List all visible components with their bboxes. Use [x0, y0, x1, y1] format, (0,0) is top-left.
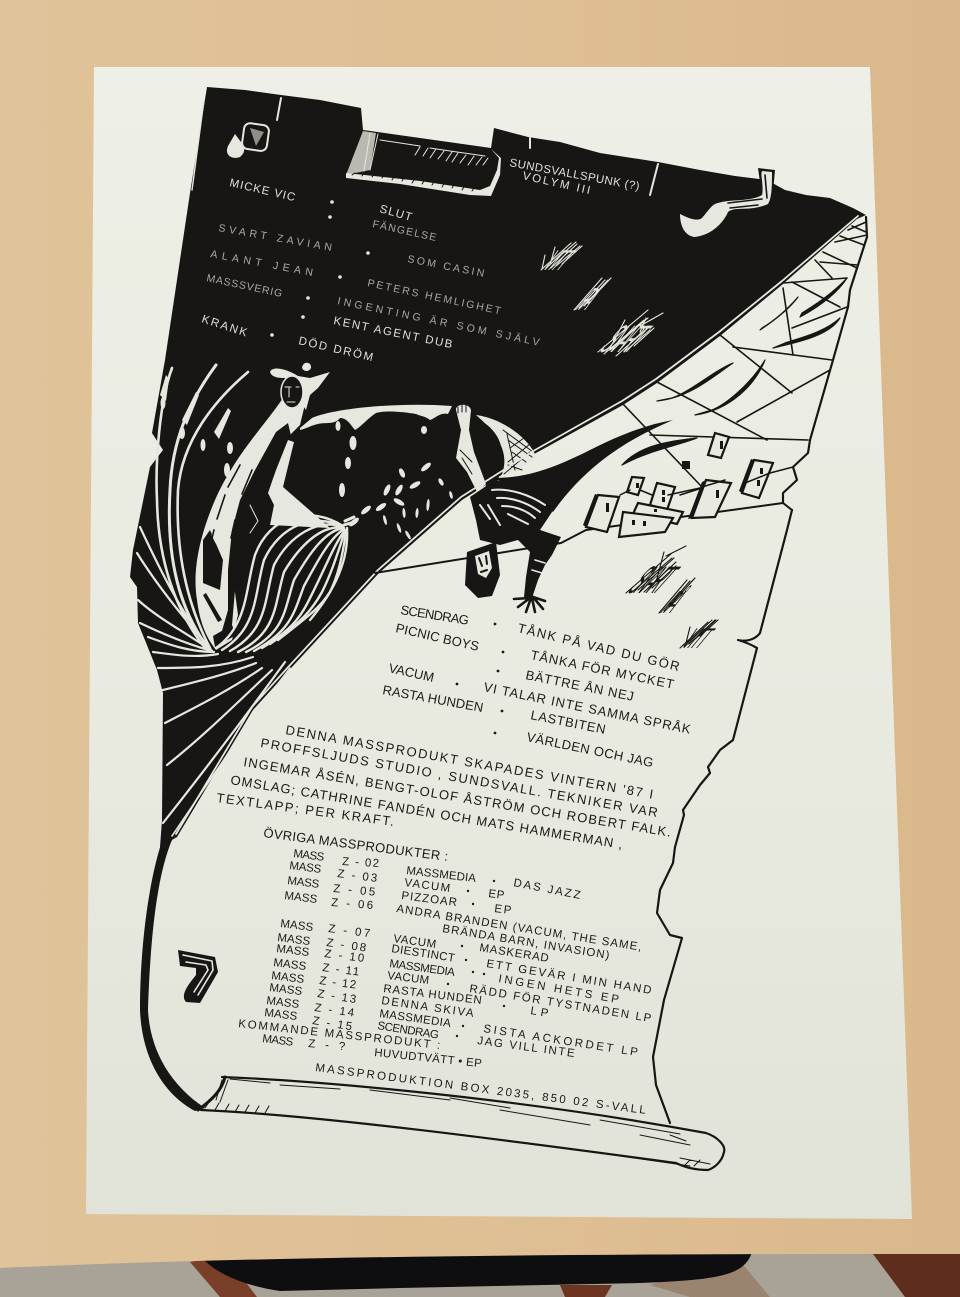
text: catalogue list: JAG VILL INTE: [477, 1035, 576, 1060]
text: catalogue list: MASSMEDIA: [379, 1008, 452, 1030]
text: catalogue list: RASTA HUNDEN: [383, 983, 482, 1007]
text: side A track list in white: SOM CASIN: [406, 253, 485, 280]
text: side B track list: LASTBITEN: [529, 707, 607, 737]
text: side A track list in white: FÄNGELSE: [371, 218, 437, 244]
text: slashed scribble in white: PÅ: [568, 281, 611, 317]
text: catalogue list: Z - 03: [337, 868, 378, 885]
text: side A track list in white: MASSSVERIG: [205, 272, 283, 300]
text: catalogue list: MASS: [280, 918, 314, 934]
text: catalogue list: ANDRA BRANDEN (VACUM, THE SAME,: [396, 903, 642, 954]
text: slashed scribble in black: PÅ: [653, 584, 696, 620]
text: slashed scribble in black: SNART: [619, 558, 689, 601]
text: catalogue list: EP: [494, 903, 512, 917]
text: catalogue list: MASS: [273, 957, 307, 973]
text: side A track list in white: DÖD DRÖM: [297, 335, 374, 364]
panel: rolled bottom of the scroll: [198, 1077, 724, 1170]
text: slashed scribble in white: [536, 242, 663, 360]
text: catalogue list: BRÄNDA BARN, INVASION): [442, 923, 610, 962]
text: side A track list in white: PETERS HEMLIGHET: [366, 277, 502, 317]
text: side A track list in white: [200, 177, 541, 364]
text: catalogue list: MASS: [266, 995, 300, 1011]
text: catalogue list: Z - 14: [314, 1002, 355, 1020]
text: side B track list: VÄRLDEN OCH JAG: [525, 729, 655, 770]
illustration: woman figure: [196, 363, 330, 650]
text: catalogue list: MASS: [264, 1007, 298, 1023]
illustration: white rim of the diagonal edge: [176, 216, 858, 834]
text: side B track list: PICNIC BOYS: [394, 620, 481, 654]
icon: torn tab ticks: [277, 98, 658, 195]
text: credits paragraph: INGEMAR ÅSÉN, BENGT-OLOF ÅSTRÖM OCH ROBERT FALK.: [243, 754, 672, 840]
text: catalogue list: MASS: [262, 1033, 294, 1049]
text: catalogue list: INGEN HETS EP: [497, 973, 620, 1006]
text: credits paragraph: DENNA MASSPRODUKT SKAPADES VINTERN '87 I: [284, 722, 654, 802]
text: catalogue list: Z - 13: [317, 988, 357, 1006]
text: catalogue list: MASSMEDIA: [389, 958, 456, 979]
text: catalogue list: SCENDRAG: [377, 1020, 440, 1042]
text: side title: SUNDSVALLSPUNK (?): [508, 157, 641, 193]
illustration: ground line: [375, 503, 792, 573]
illustration: falling drops and seeds: [336, 421, 453, 540]
text: catalogue list: ÖVRIGA MASSPRODUKTER :: [263, 825, 449, 864]
text: slashed scribble in black: VITT: [675, 622, 722, 654]
panel: black sky of the scroll: [130, 87, 866, 847]
hair splash: [270, 363, 330, 410]
text: side title: VOLYM III: [521, 170, 591, 197]
text: catalogue list: HUVUDTVÄTT • EP: [374, 1047, 483, 1070]
text: credits paragraph: PROFFSLJUDS STUDIO , SUNDSVALL. TEKNIKER VAR: [259, 735, 659, 820]
text: catalogue list: MASS: [271, 970, 305, 986]
text: catalogue list: Z - 08: [326, 937, 367, 955]
text: side B track list: TÅNKA FÖR MYCKET: [529, 647, 675, 692]
text: catalogue list: ETT GEVÄR I MIN HAND: [486, 958, 652, 997]
icon: small square tab with blob: [227, 122, 270, 158]
text: catalogue list: KOMMANDE MASSPRODUKT :: [238, 1018, 441, 1052]
text: side A track list in white: MICKE VIC: [228, 177, 296, 204]
text: side A track list in white: KENT AGENT DUB: [332, 315, 454, 351]
text: side A track list in white: INGENTING ÄR SOM SJÄLV: [336, 295, 541, 349]
text: catalogue list: Z - 02: [342, 856, 379, 870]
text: catalogue list: SISTA ACKORDET LP: [483, 1023, 639, 1059]
text: credits paragraph: TEXTLAPP; PER KRAFT.: [216, 790, 395, 829]
illustration: cracked sky lines: [623, 222, 867, 487]
text: side A track list in white: SVART ZAVIAN: [217, 222, 333, 254]
text: catalogue list: VACUM: [404, 877, 451, 895]
text: catalogue list: EP: [488, 888, 505, 902]
text: side B track list: RASTA HUNDEN: [381, 682, 485, 715]
text: side B track list: SCENDRAG: [400, 602, 470, 628]
hand: [514, 597, 545, 612]
text: catalogue list: MASSMEDIA: [406, 865, 477, 885]
text: slashed scribble in white: SNART: [591, 317, 661, 360]
text: side A track list in white: SLUT: [378, 203, 413, 224]
boot and foot: [203, 530, 236, 647]
text: credits paragraph: [216, 722, 672, 852]
text: catalogue list: Z - 11: [322, 962, 360, 978]
text: catalogue list: MASKERAD: [479, 942, 550, 965]
text: side B track list: [381, 602, 692, 770]
text: side B track list: VI TALAR INTE SAMMA SPRÅK: [482, 679, 692, 737]
panel: scroll outline on the right: [653, 217, 867, 1123]
text: catalogue list: DENNA SKIVA: [381, 995, 475, 1020]
text: catalogue list: MASS: [277, 932, 311, 948]
text: catalogue list: Z - 15: [312, 1015, 353, 1033]
lit thigh and arm: [268, 440, 330, 528]
text: credits paragraph: OMSLAG; CATHRINE FANDÉN OCH MATS HAMMERMAN ,: [230, 772, 624, 852]
illustration: striped skirt: [216, 515, 354, 652]
text: catalogue list: RÄDD FÖR TYSTNADEN LP: [469, 983, 652, 1025]
illustration: town buildings: [583, 433, 793, 537]
illustration: dripping crescent: [300, 405, 452, 430]
text: catalogue list: MASS: [276, 943, 310, 959]
head: [465, 542, 500, 598]
text: slashed scribble in black: [619, 546, 722, 654]
icon: hook shaped tab: [680, 168, 775, 237]
text: catalogue list: LP: [530, 1005, 550, 1020]
illustration: hanging man: [465, 420, 673, 612]
text: catalogue list: MASS: [287, 875, 320, 891]
text: catalogue list: Z - 06: [331, 897, 374, 912]
text: catalogue list: [238, 825, 652, 1117]
text: catalogue list: Z - 05: [333, 883, 376, 899]
text: catalogue list: VACUM: [387, 970, 430, 987]
text: catalogue list: MASS: [284, 890, 318, 906]
dark drips on the cloak: [209, 465, 252, 550]
text: side B track list: BÄTTRE ÅN NEJ: [524, 667, 635, 704]
text: catalogue list: DIESTINCT: [391, 943, 456, 965]
text: catalogue list: DAS JAZZ: [512, 877, 581, 902]
text: catalogue list: MASSPRODUKTION BOX 2035, 850 02 S-VALL: [315, 1062, 647, 1117]
text: side B track list: TÅNK PÅ VAD DU GÖR: [516, 620, 681, 674]
illustration: net held by the man: [470, 415, 537, 486]
illustration: black leaf slashes: [622, 278, 847, 465]
text: side B track list: VACUM: [387, 660, 436, 685]
panel: left scroll edge: [140, 835, 205, 1111]
drips on the fan: [160, 375, 233, 477]
paper sheet: [86, 67, 912, 1219]
icon: rolled scroll at the top: [346, 131, 501, 196]
highlight on the left torn edge: [192, 100, 204, 190]
illustration: fan of white rays: [137, 365, 290, 836]
text: catalogue list: MASS: [289, 860, 322, 876]
text: catalogue list: PIZZOAR: [401, 890, 458, 909]
text: side A track list in white: KRANK: [200, 313, 249, 339]
text: catalogue list: Z - 12: [319, 975, 357, 991]
text: catalogue list: Z - 10: [324, 948, 365, 965]
text: side A track list in white: ALANT JEAN: [209, 248, 314, 279]
icon: large number 7: [178, 950, 218, 1003]
text: slashed scribble in white: VITT: [536, 244, 583, 276]
illustration: raised arm: [456, 405, 486, 492]
head: [281, 376, 303, 408]
text: catalogue list: Z - ?: [308, 1038, 346, 1053]
text: catalogue list: VACUM: [393, 933, 437, 951]
torso: [218, 423, 292, 645]
text: catalogue list: MASS: [269, 982, 303, 998]
text: catalogue list: Z - 07: [328, 923, 371, 940]
text: catalogue list: MASS: [293, 848, 325, 864]
